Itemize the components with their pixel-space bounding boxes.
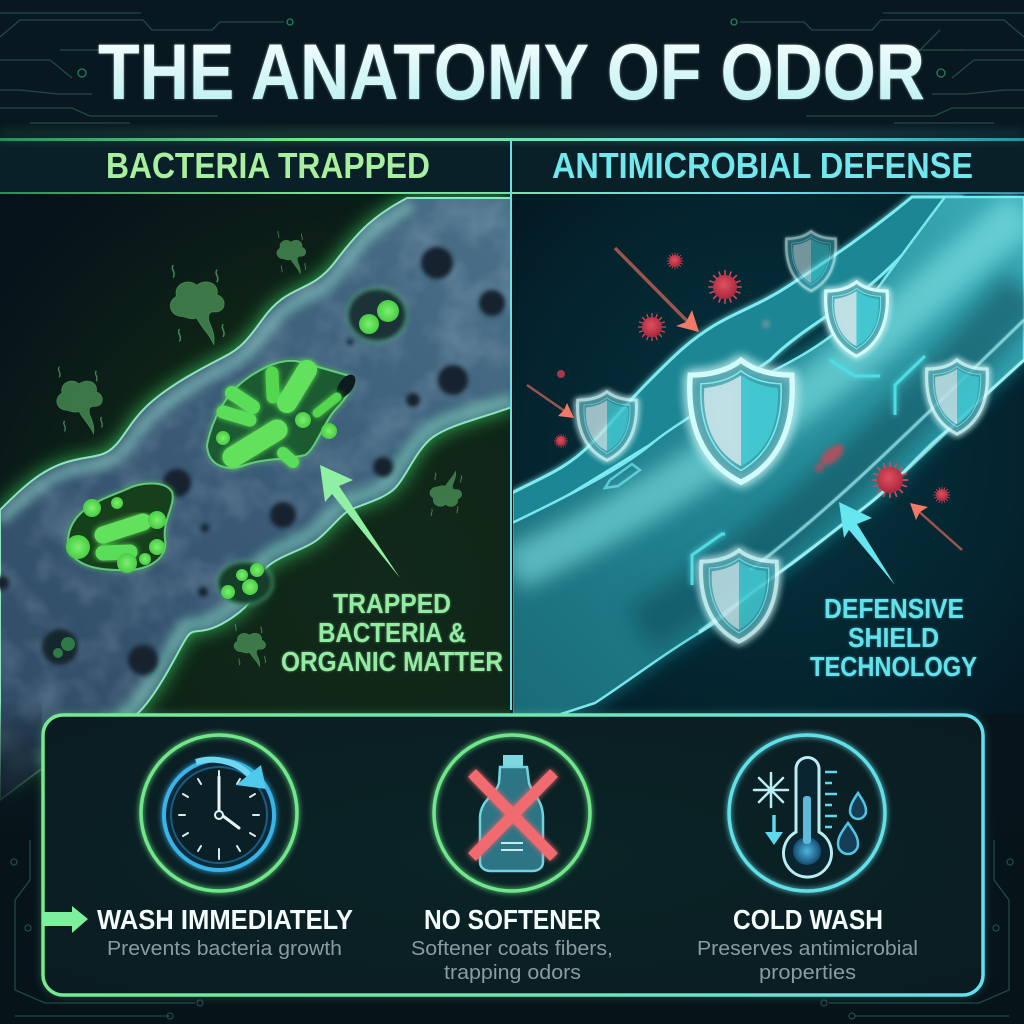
shield: bottom [701, 550, 777, 642]
fiber tubes [512, 197, 1024, 730]
arrow: red, left [527, 385, 574, 418]
tip: cold wash [697, 904, 918, 984]
tip: no softener: Softener coats fibers, [411, 938, 613, 960]
label: trapped bacteria: TRAPPED [333, 588, 451, 619]
icon: thermometer [729, 735, 885, 891]
arrow: defensive shield [839, 502, 895, 585]
tip: wash immediately: WASH IMMEDIATELY [97, 904, 353, 935]
tip: cold wash: Preserves antimicrobial [697, 938, 918, 960]
viruses [554, 253, 950, 503]
bacteria cluster: lower [217, 561, 273, 605]
odor clouds [57, 231, 462, 667]
icon: softener bottle [434, 735, 590, 891]
arrow: red, top [615, 248, 699, 332]
bracket accents [692, 534, 725, 585]
header band [0, 128, 1024, 710]
tip: wash immediately [97, 904, 353, 960]
label: trapped bacteria: ORGANIC MATTER [281, 646, 503, 677]
shield: left [578, 392, 636, 460]
tip: cold wash: properties [759, 962, 856, 984]
bacteria cluster: top right [347, 288, 407, 342]
label: defensive shield: SHIELD [848, 622, 939, 653]
label: trapped bacteria [281, 588, 503, 677]
label: defensive shield: DEFENSIVE [824, 593, 964, 624]
shield: upper right [826, 282, 887, 356]
label: defensive shield: TECHNOLOGY [810, 651, 977, 682]
panel: bacteria trapped [0, 190, 512, 810]
panel: care tips [42, 715, 983, 995]
heading: bacteria trapped: BACTERIA TRAPPED [106, 145, 430, 186]
tip: no softener: trapping odors [444, 962, 581, 984]
arrow: green pointer [42, 906, 88, 933]
tip: cold wash: COLD WASH [733, 904, 883, 935]
shield: center [690, 360, 792, 482]
bacteria cluster: left [66, 484, 173, 573]
arrow: red, lower [910, 503, 962, 550]
tip: no softener: NO SOFTENER [424, 904, 601, 935]
icon: clock [141, 735, 297, 891]
tip: no softener [411, 904, 613, 984]
panel: antimicrobial defense [512, 194, 1024, 730]
holes [0, 247, 505, 675]
label: defensive shield [810, 593, 977, 682]
tip: wash immediately: Prevents bacteria growth [107, 938, 342, 960]
shield: top, dim [786, 232, 836, 291]
blurred absorbed viruses [762, 320, 847, 472]
shield: right [927, 360, 987, 434]
fiber [0, 190, 512, 810]
heading: antimicrobial defense: ANTIMICROBIAL DEFENSE [552, 145, 973, 186]
bacteria cluster: center [207, 361, 359, 468]
bacteria cluster: dim [42, 629, 78, 665]
arrow: trapped bacteria [320, 465, 400, 578]
label: trapped bacteria: BACTERIA & [318, 617, 466, 648]
